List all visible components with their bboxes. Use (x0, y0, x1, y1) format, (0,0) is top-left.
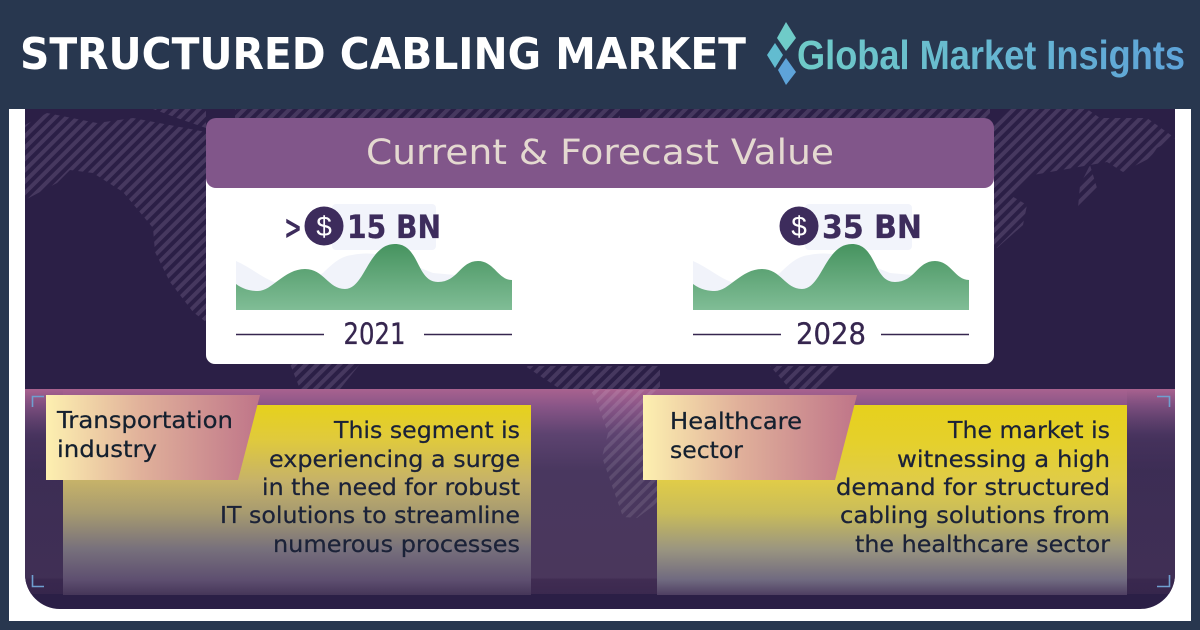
green wave (693, 244, 969, 310)
description text: cabling solutions from (840, 501, 1110, 529)
tag: transportation industry: industry (57, 435, 157, 463)
icon: dollar (780, 206, 818, 246)
value highlight (805, 204, 912, 250)
value: greater than 15 BN (284, 206, 441, 248)
year 2021: 2021 (344, 317, 406, 351)
logo: Global Market Insights (767, 22, 1185, 85)
description text: the healthcare sector (855, 530, 1110, 558)
title: STRUCTURED CABLING MARKET (20, 29, 746, 80)
green wave (236, 244, 512, 310)
tag: healthcare sector: Healthcare (670, 407, 802, 435)
map: lower hatch strip (290, 364, 840, 389)
band: gradient strip behind the segments (25, 389, 1175, 594)
value: greater than 15 BN: 15 BN (347, 208, 441, 246)
description text: demand for structured (836, 473, 1110, 501)
icon: dollar: $ (791, 211, 807, 242)
description text: experiencing a surge (269, 445, 520, 473)
description text (836, 416, 1110, 558)
year 2028: 2028 (796, 317, 866, 351)
tag: transportation industry: Transportation (56, 406, 233, 434)
description text: in the need for robust (262, 473, 520, 501)
description text: This segment is (333, 416, 520, 444)
description text: The market is (947, 416, 1110, 444)
description text: witnessing a high (897, 445, 1110, 473)
pale wave (693, 254, 969, 310)
chart: 2021 value (236, 204, 512, 351)
map: right continent hatch (990, 109, 1175, 248)
description text (220, 416, 520, 558)
band: darker side shading (25, 389, 1175, 594)
map: hatch over strip (590, 390, 657, 518)
icon: corner brackets (32, 396, 1170, 586)
panel: transportation industry (46, 395, 531, 595)
panel: healthcare sector (643, 395, 1127, 595)
pale wave (236, 254, 512, 310)
icon: dollar: $ (316, 211, 332, 242)
icon: logo diamonds (767, 22, 796, 85)
map: left continent hatch (25, 113, 206, 322)
icon: dollar (304, 206, 344, 246)
panel: current and forecast value card (206, 118, 994, 364)
description text: IT solutions to streamline (220, 501, 520, 529)
map: upper hatch strip (153, 109, 990, 128)
value: 35 BN (780, 206, 922, 246)
value: greater than 15 BN: > (284, 208, 302, 248)
card heading bar (206, 118, 994, 188)
header (20, 22, 1185, 85)
chart: 2028 value (693, 204, 969, 351)
value: 35 BN: 35 BN (822, 208, 922, 246)
tag: transportation industry (46, 395, 260, 480)
description text: numerous processes (273, 530, 520, 558)
heading text: Current & Forecast Value (366, 133, 834, 173)
yellow text box (657, 405, 1127, 595)
tag: healthcare sector (643, 395, 857, 480)
tag: healthcare sector: sector (670, 436, 743, 464)
yellow text box (63, 405, 531, 595)
panel: dark world map background (25, 109, 1175, 609)
value highlight (332, 204, 436, 250)
